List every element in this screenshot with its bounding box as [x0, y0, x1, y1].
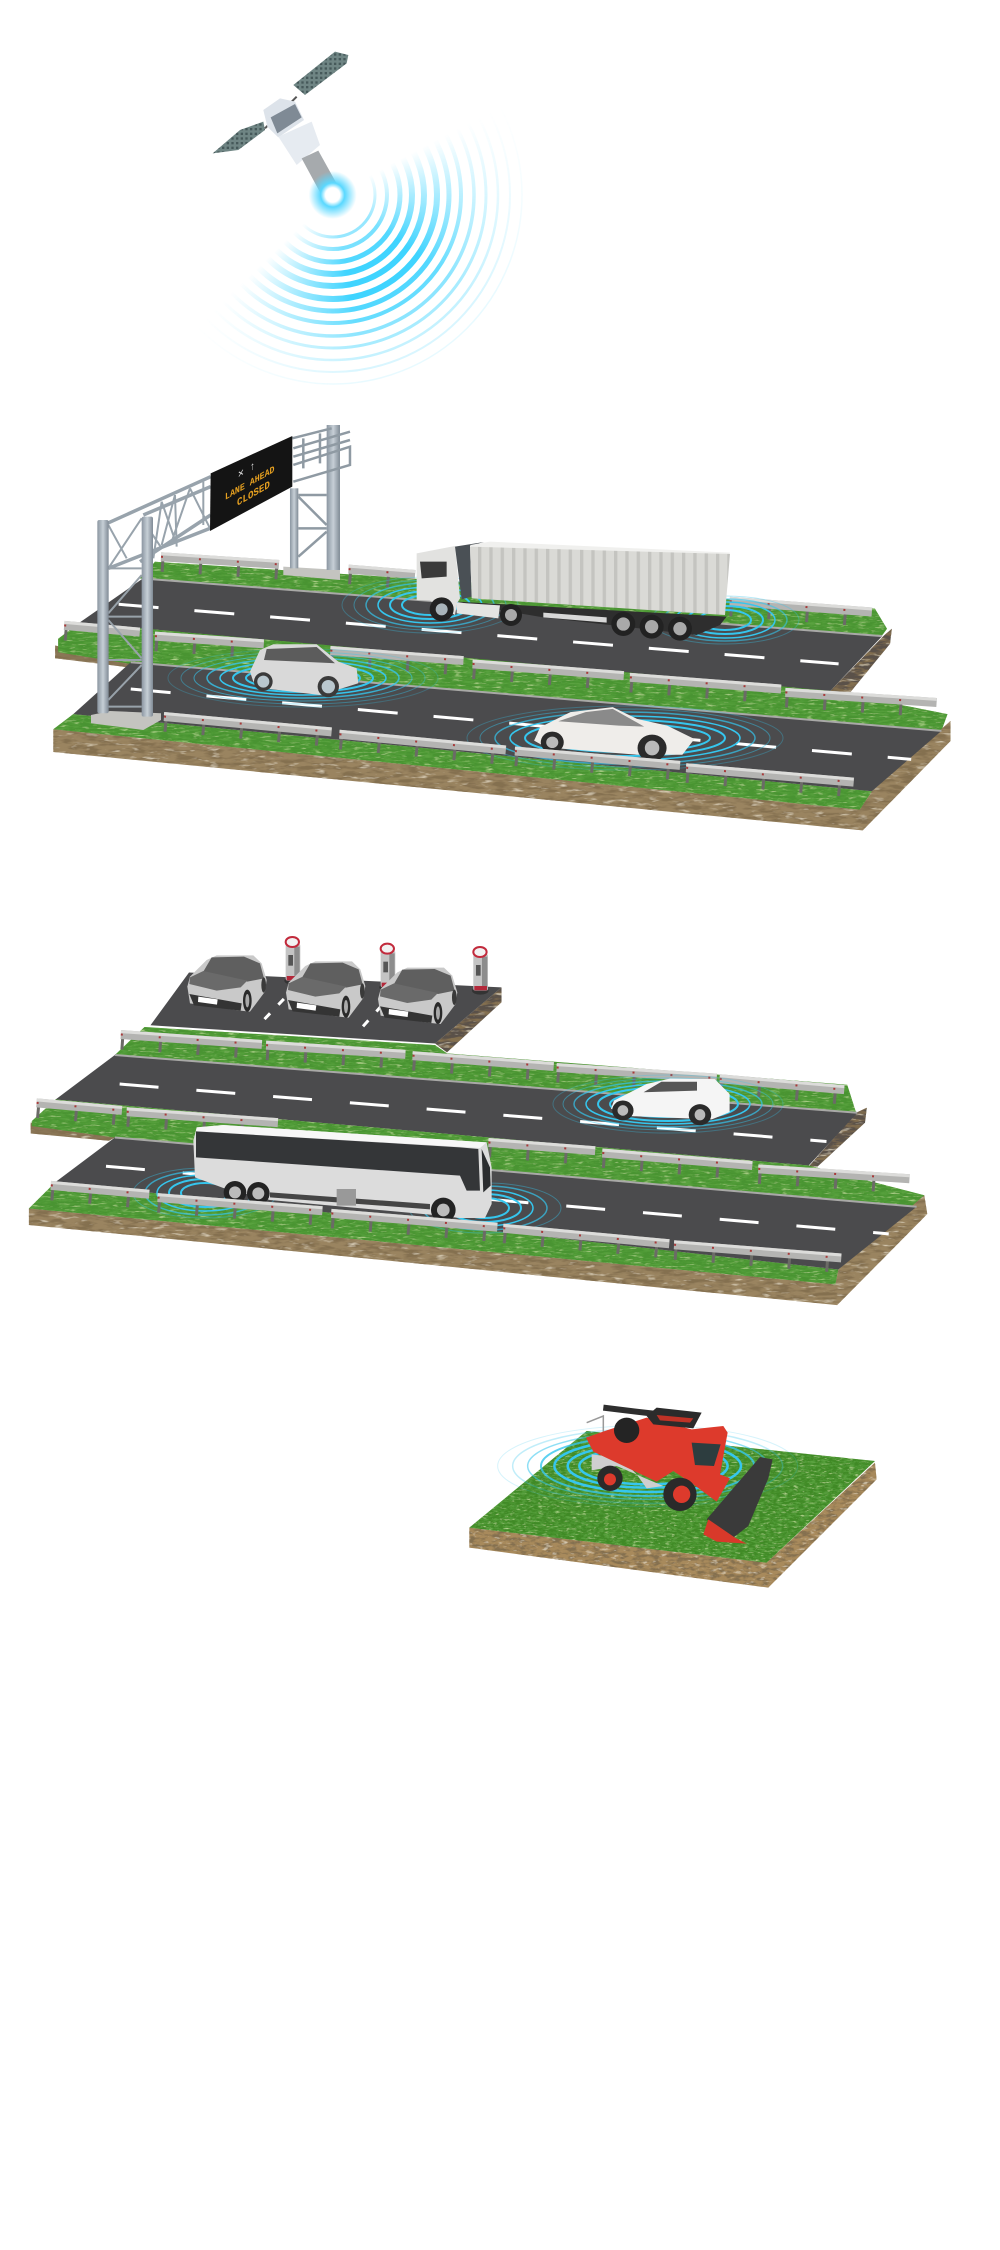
front road edge: [115, 1138, 917, 1207]
middle grass: [58, 623, 947, 731]
guard rails back: [161, 554, 872, 621]
soil block: [469, 1463, 877, 1588]
truck sensor rings right: [651, 596, 799, 644]
truck sensor rings left: [342, 577, 518, 633]
harvester sensor rings: [498, 1425, 798, 1507]
hatchback sensor rings: [553, 1075, 783, 1133]
back slab soil: [830, 629, 892, 692]
back road: [79, 578, 882, 692]
guard rails front scene 2: [51, 1182, 841, 1267]
back road: [56, 1055, 857, 1166]
front soil: [53, 721, 951, 830]
truck: [417, 542, 730, 641]
highway scene 1 ground: [53, 554, 951, 830]
gantry left posts: [91, 517, 161, 730]
parking lot surface: [150, 972, 502, 1043]
bus front sensor rings: [409, 1183, 561, 1233]
sign message: LANE AHEAD: [225, 463, 275, 503]
gantry right tower: [283, 425, 350, 580]
bus rear sensor rings: [133, 1168, 277, 1218]
gantry truss: [107, 477, 211, 568]
sign message: CLOSED: [237, 479, 270, 510]
back road lane marks: [119, 604, 839, 664]
guard rails back: [121, 1032, 844, 1099]
white hatchback: [611, 1078, 730, 1125]
sign arrow marks: ✕ ↑: [238, 460, 255, 482]
white sedan: [534, 707, 694, 761]
solar panel upper: [293, 52, 348, 95]
front grass: [53, 714, 872, 810]
back road edge: [143, 578, 882, 636]
back slab soil: [809, 1108, 867, 1167]
car 2 sensor rings: [467, 706, 783, 770]
satellite body: [263, 98, 338, 198]
variable message sign panel: [210, 436, 292, 531]
front road edge: [131, 662, 941, 731]
guard rails middle: [64, 622, 937, 711]
middle grass: [32, 1100, 924, 1207]
parked cars: [187, 955, 457, 1024]
highway scene 2 ground: [29, 972, 927, 1305]
front road: [56, 1138, 917, 1270]
thruster glow: [309, 171, 357, 219]
parking bay lines: [260, 999, 382, 1032]
front soil: [29, 1195, 927, 1305]
back road edge: [115, 1055, 857, 1113]
harvester header: [707, 1457, 773, 1538]
front grass: [29, 1182, 838, 1284]
combine harvester: [586, 1408, 773, 1544]
coach bus: [193, 1125, 492, 1222]
back grass: [140, 562, 887, 637]
field scene with harvester: [469, 1408, 877, 1588]
front road lane marks: [131, 689, 911, 759]
back road lane marks: [120, 1084, 826, 1141]
guard rails middle: [37, 1100, 910, 1188]
gray car: [250, 644, 358, 697]
chargers: [284, 937, 489, 995]
front road: [73, 662, 941, 791]
grass top: [469, 1431, 875, 1563]
overhead gantry: [91, 425, 350, 730]
signal rings from satellite: [232, 138, 522, 385]
parking lot side: [435, 987, 502, 1052]
satellite: [213, 52, 357, 219]
guard rails front scene 1: [164, 714, 854, 791]
front road lane marks: [106, 1166, 889, 1234]
car 1 sensor rings: [168, 649, 438, 707]
back grass: [115, 1027, 856, 1113]
solar panel lower: [213, 122, 265, 153]
